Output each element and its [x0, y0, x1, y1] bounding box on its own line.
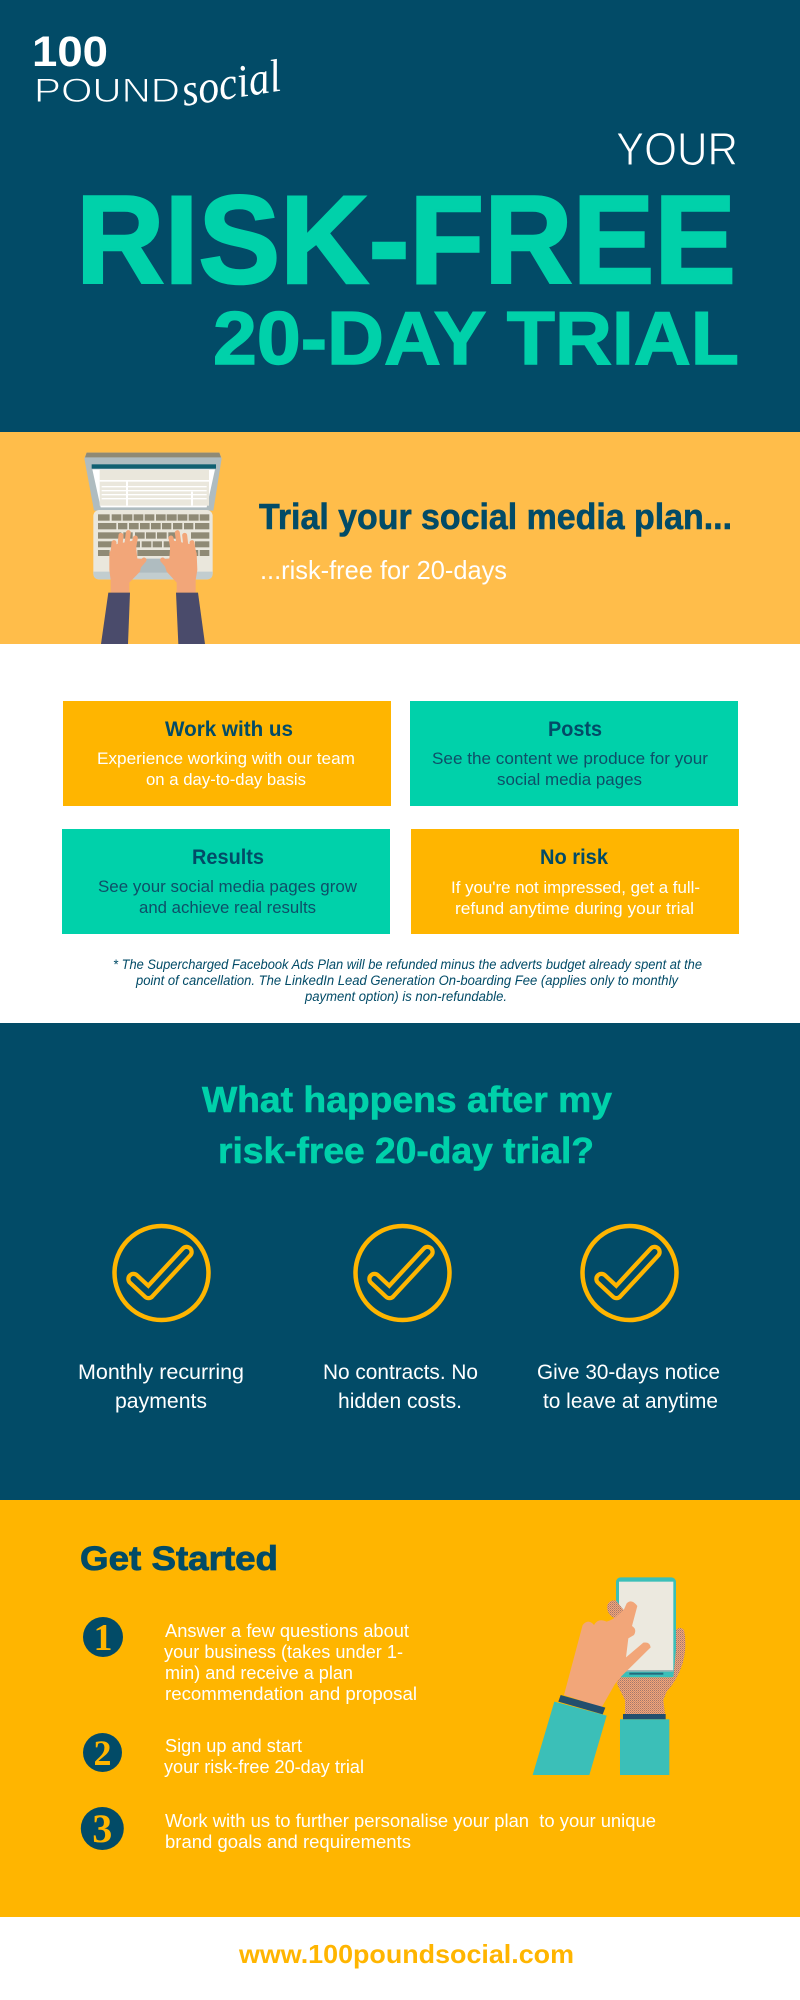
text: 30-days notice: to leave at anytime — [543, 1390, 718, 1413]
footnote: * The Supercharged Facebook Ads Plan will be refunded minus the adverts budget already spent at the — [113, 957, 702, 972]
panel: header — [0, 0, 800, 432]
step 3 number: 3 — [92, 1806, 112, 1851]
card: results: and achieve real results — [139, 898, 316, 917]
subheading: risk-free for 20-days: ...risk-free for 20-days — [260, 555, 507, 585]
text: 30-days notice — [537, 1361, 720, 1413]
card: no risk: No risk — [540, 846, 608, 869]
card: results: See your social media pages grow — [98, 877, 358, 896]
text: monthly recurring payments — [78, 1361, 244, 1413]
card: results — [62, 829, 390, 934]
panel: trial your plan banner — [0, 432, 800, 644]
step 2 text — [164, 1736, 364, 1777]
card: results: Results — [192, 846, 264, 869]
icon: check circle 2 — [356, 1226, 450, 1320]
text: monthly recurring payments: payments — [115, 1390, 207, 1413]
text: 30-days notice: Give 30-days notice — [537, 1361, 720, 1384]
card: work with us: Work with us — [165, 718, 293, 741]
card: no risk: If you're not impressed, get a full- — [451, 878, 700, 897]
card: work with us: on a day-to-day basis — [146, 770, 306, 789]
step 2 number: 2 — [94, 1733, 112, 1773]
text: monthly recurring payments: Monthly recurring — [78, 1361, 244, 1384]
step 2 number — [83, 1733, 122, 1773]
panel: get started — [0, 1500, 800, 1918]
card: work with us: Experience working with our team — [97, 749, 355, 768]
step 2 text: your risk-free 20-day trial — [164, 1757, 364, 1777]
icon: check circle 3 — [582, 1226, 676, 1320]
step 1 text: Answer a few questions about — [165, 1621, 409, 1641]
heading: what happens after — [202, 1079, 612, 1171]
logo: 100 Pound Social: 100 — [32, 28, 108, 76]
card: posts: Posts — [548, 718, 602, 741]
step 3 text — [165, 1811, 656, 1852]
title: risk-free: RISK-FREE — [76, 171, 736, 310]
title: 20-day trial: 20-DAY TRIAL — [213, 296, 739, 380]
heading: what happens after: risk-free 20-day trial? — [218, 1130, 594, 1171]
card: work with us — [63, 701, 391, 806]
text: no contracts — [323, 1361, 478, 1413]
heading: get started: Get Started — [80, 1540, 278, 1578]
heading: what happens after: What happens after my — [202, 1079, 612, 1120]
footnote — [113, 957, 702, 1004]
card: posts — [410, 701, 738, 806]
footnote: point of cancellation. The LinkedIn Lead Generation On-boarding Fee (applies only to monthly — [135, 973, 679, 988]
step 3 number — [81, 1806, 124, 1851]
step 1 text: recommendation and proposal — [165, 1684, 417, 1704]
step 3 text: brand goals and requirements — [165, 1832, 411, 1852]
panel: benefits — [0, 644, 800, 1023]
text: no contracts: No contracts. No — [323, 1361, 478, 1384]
logo: 100 Pound Social: POUND — [34, 72, 180, 110]
card: posts: social media pages — [497, 770, 642, 789]
card: no risk: refund anytime during your trial — [455, 899, 694, 918]
logo: 100 Pound Social — [32, 28, 284, 116]
step 1 number: 1 — [94, 1617, 112, 1659]
step 2 text: Sign up and start — [165, 1736, 302, 1756]
logo: 100 Pound Social: social — [178, 50, 284, 116]
step 1 text: min) and receive a plan — [165, 1663, 353, 1683]
website url: www.100poundsocial.com — [238, 1939, 574, 1969]
heading: trial your social media plan: Trial your social media plan... — [259, 496, 732, 537]
text: no contracts: hidden costs. — [338, 1390, 462, 1413]
icon: hands typing on laptop — [84, 453, 222, 644]
card: posts: See the content we produce for your — [432, 749, 708, 768]
title: your: YOUR — [616, 123, 738, 175]
panel: footer — [0, 1917, 800, 2000]
panel: what happens after trial — [0, 1023, 800, 1500]
step 3 text: Work with us to further personalise your plan to your unique — [165, 1811, 656, 1831]
step 1 number — [83, 1617, 123, 1659]
step 1 text — [164, 1621, 417, 1704]
icon: check circle 1 — [114, 1226, 208, 1320]
card: no risk — [411, 829, 739, 934]
icon: hands using phone — [533, 1577, 685, 1775]
footnote: payment option) is non-refundable. — [304, 989, 507, 1004]
step 1 text: your business (takes under 1- — [164, 1642, 403, 1662]
